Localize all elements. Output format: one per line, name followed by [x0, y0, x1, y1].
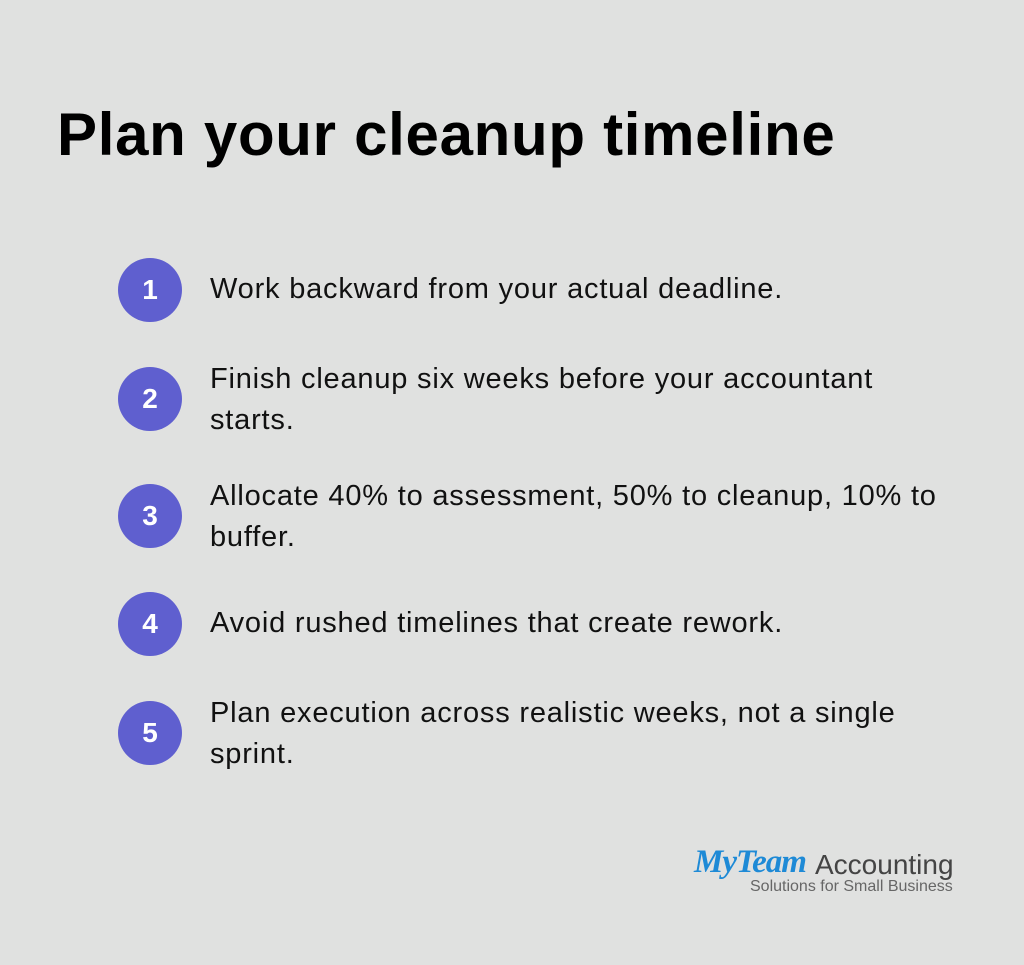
item 2: [118, 363, 873, 436]
logo: Solutions for Small Business: [750, 878, 953, 895]
circle 1: 1: [142, 274, 158, 305]
item 3: [118, 480, 937, 553]
text 4: Avoid rushed timelines that create rework.: [210, 607, 783, 639]
text 2: Finish cleanup six weeks before your accountant starts.: [210, 363, 873, 436]
logo: MyTeam: [694, 844, 806, 880]
circle 1: [118, 258, 182, 322]
logo: [694, 844, 954, 895]
circle 3: [118, 484, 182, 548]
circle 3: 3: [142, 500, 158, 531]
circle 4: [118, 592, 182, 656]
text 5: Plan execution across realistic weeks, not a single sprint.: [210, 697, 896, 770]
text 3: Allocate 40% to assessment, 50% to cleanup, 10% to buffer.: [210, 480, 937, 553]
circle 5: [118, 701, 182, 765]
circle 2: [118, 367, 182, 431]
circle 4: 4: [142, 608, 158, 639]
circle 2: 2: [142, 383, 158, 414]
item 1: [118, 258, 783, 322]
item 4: [118, 592, 783, 656]
title: Plan your cleanup timeline: [57, 101, 835, 168]
text 1: Work backward from your actual deadline.: [210, 273, 783, 305]
logo: Accounting: [815, 849, 954, 880]
item 5: [118, 697, 896, 770]
circle 5: 5: [142, 717, 158, 748]
